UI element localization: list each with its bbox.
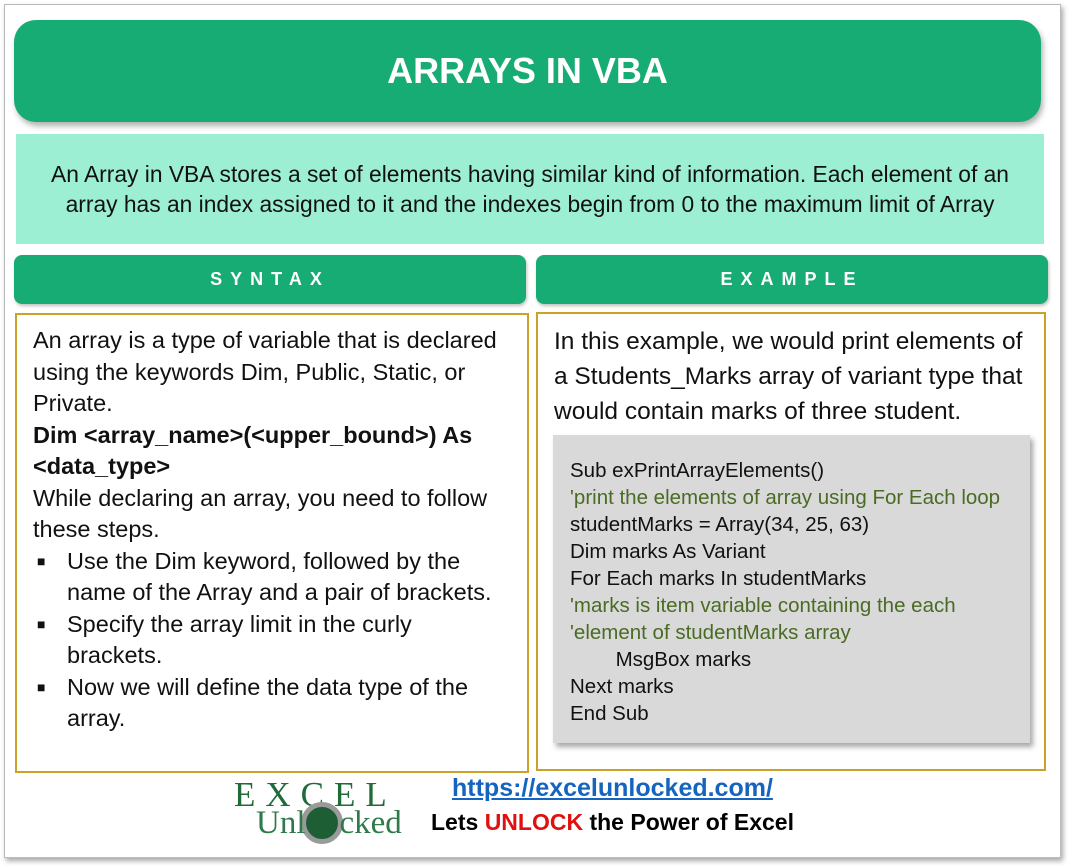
code box: For Each marks In studentMarks	[570, 567, 866, 590]
heading: syntax	[14, 255, 526, 304]
code box: Sub exPrintArrayElements()	[570, 459, 824, 482]
code box: End Sub	[570, 702, 649, 725]
link: https://excelunlocked.com/	[452, 774, 773, 802]
bullet list	[37, 548, 492, 731]
description: array has an index assigned to it and the indexes begin from 0 to the maximum limit of Array	[66, 191, 994, 217]
code box: 'element of studentMarks array	[570, 621, 851, 644]
heading: example	[536, 255, 1048, 304]
title: ARRAYS IN VBA	[387, 50, 668, 91]
logo: EXCEL	[234, 775, 397, 814]
bullet list: Use the Dim keyword, followed by the name of the Array and a pair of brackets.	[67, 548, 492, 605]
panel: syntax: While declaring an array, you need to follow these steps.	[33, 484, 487, 542]
description: An Array in VBA stores a set of elements having similar kind of information. Each element of an	[51, 161, 1009, 187]
panel: syntax	[15, 313, 529, 773]
heading: syntax: SYNTAX	[210, 269, 330, 289]
logo	[234, 775, 402, 844]
title	[14, 20, 1041, 122]
bullet list: ■	[37, 678, 45, 694]
bullet list: Now we will define the data type of the array.	[67, 674, 468, 731]
code box: studentMarks = Array(34, 25, 63)	[570, 513, 869, 536]
code box	[553, 435, 1030, 743]
heading: example: EXAMPLE	[720, 269, 864, 289]
code box: 'print the elements of array using For Each loop	[570, 486, 1000, 509]
panel: example: In this example, we would print elements of a Students_Marks array of variant type that would contain marks of three student.	[554, 328, 1022, 425]
code box: Dim marks As Variant	[570, 540, 766, 563]
bullet list: ■	[37, 552, 45, 568]
description	[16, 134, 1044, 244]
logo: Unl cked	[256, 805, 402, 841]
panel: syntax: An array is a type of variable that is declared using the keywords Dim, Public, Static, or Private.	[33, 327, 497, 416]
panel: syntax: Dim <array_name>(<upper_bound>) As <data_type>	[33, 422, 472, 479]
panel: example	[536, 312, 1046, 771]
bullet list: ■	[37, 616, 45, 632]
tagline: Lets UNLOCK the Power of Excel	[431, 809, 794, 835]
code box: 'marks is item variable containing the each	[570, 594, 956, 617]
bullet list: Specify the array limit in the curly brackets.	[67, 610, 412, 668]
code box: Next marks	[570, 675, 674, 698]
code box: MsgBox marks	[616, 648, 751, 671]
